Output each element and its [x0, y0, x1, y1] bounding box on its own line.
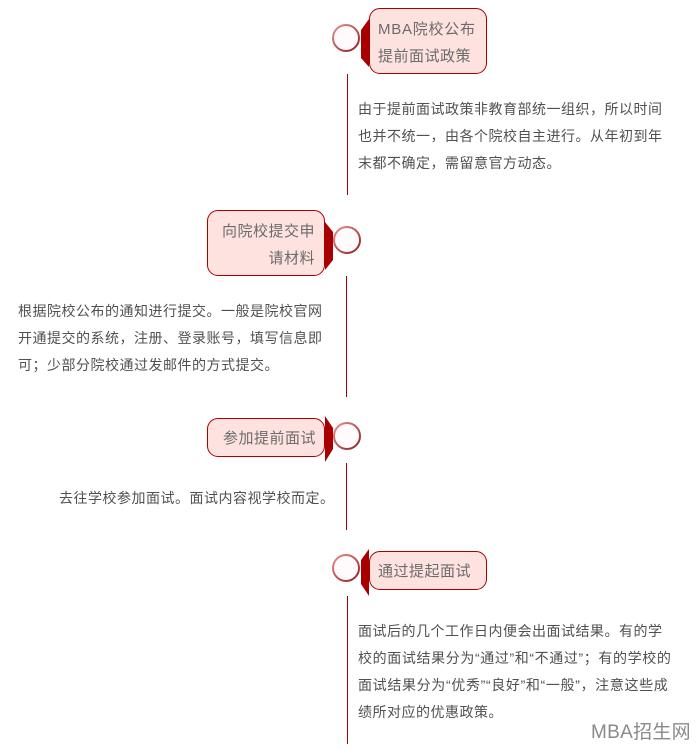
step 1 connector line — [347, 74, 348, 195]
step 1 text line 2: 也并不统一，由各个院校自主进行。从年初到年 — [358, 128, 662, 144]
step 4 heading: 通过提起面试 — [378, 563, 471, 580]
step 4 text line 4: 绩所对应的优惠政策。 — [358, 704, 503, 720]
step 2 heading line 1: 向院校提交申 — [222, 223, 315, 240]
step 1 heading line 1: MBA院校公布 — [378, 21, 476, 38]
watermark: MBA招生网 — [591, 722, 691, 743]
step 4 connector line — [347, 596, 348, 744]
step 2 text line 2: 开通提交的系统，注册、登录账号，填写信息即 — [18, 330, 322, 346]
step 4 text line 3: 面试结果分为“优秀”“良好”和“一般”，注意这些成 — [358, 677, 668, 693]
step 4 text line 2: 校的面试结果分为“通过”和“不通过”；有的学校的 — [358, 650, 672, 666]
step 2 connector line — [346, 276, 347, 397]
icon: node 4 circle and pointer — [333, 549, 369, 596]
step 2 text line 3: 可；少部分院校通过发邮件的方式提交。 — [18, 357, 279, 373]
step 2 heading line 2: 请材料 — [268, 250, 315, 267]
step 4 text line 1: 面试后的几个工作日内便会出面试结果。有的学 — [358, 623, 662, 639]
step 2 bubble — [207, 210, 325, 276]
step 3 bubble — [207, 418, 325, 457]
step 3 text: 去往学校参加面试。面试内容视学校而定。 — [59, 490, 334, 506]
step 2 text line 1: 根据院校公布的通知进行提交。一般是院校官网 — [18, 303, 322, 319]
step 4 bubble — [369, 551, 487, 590]
step 1 text line 3: 末都不确定，需留意官方动态。 — [358, 155, 561, 171]
icon: node 2 circle and pointer — [325, 222, 360, 270]
step 3 heading: 参加提前面试 — [223, 430, 316, 447]
step 1 bubble — [369, 8, 487, 74]
step 1 heading line 2: 提前面试政策 — [378, 48, 471, 65]
icon: node 3 circle and pointer — [325, 416, 360, 462]
icon: node 1 circle and pointer — [333, 19, 369, 67]
step 1 text line 1: 由于提前面试政策非教育部统一组织，所以时间 — [358, 101, 662, 117]
step 3 connector line — [346, 463, 347, 530]
